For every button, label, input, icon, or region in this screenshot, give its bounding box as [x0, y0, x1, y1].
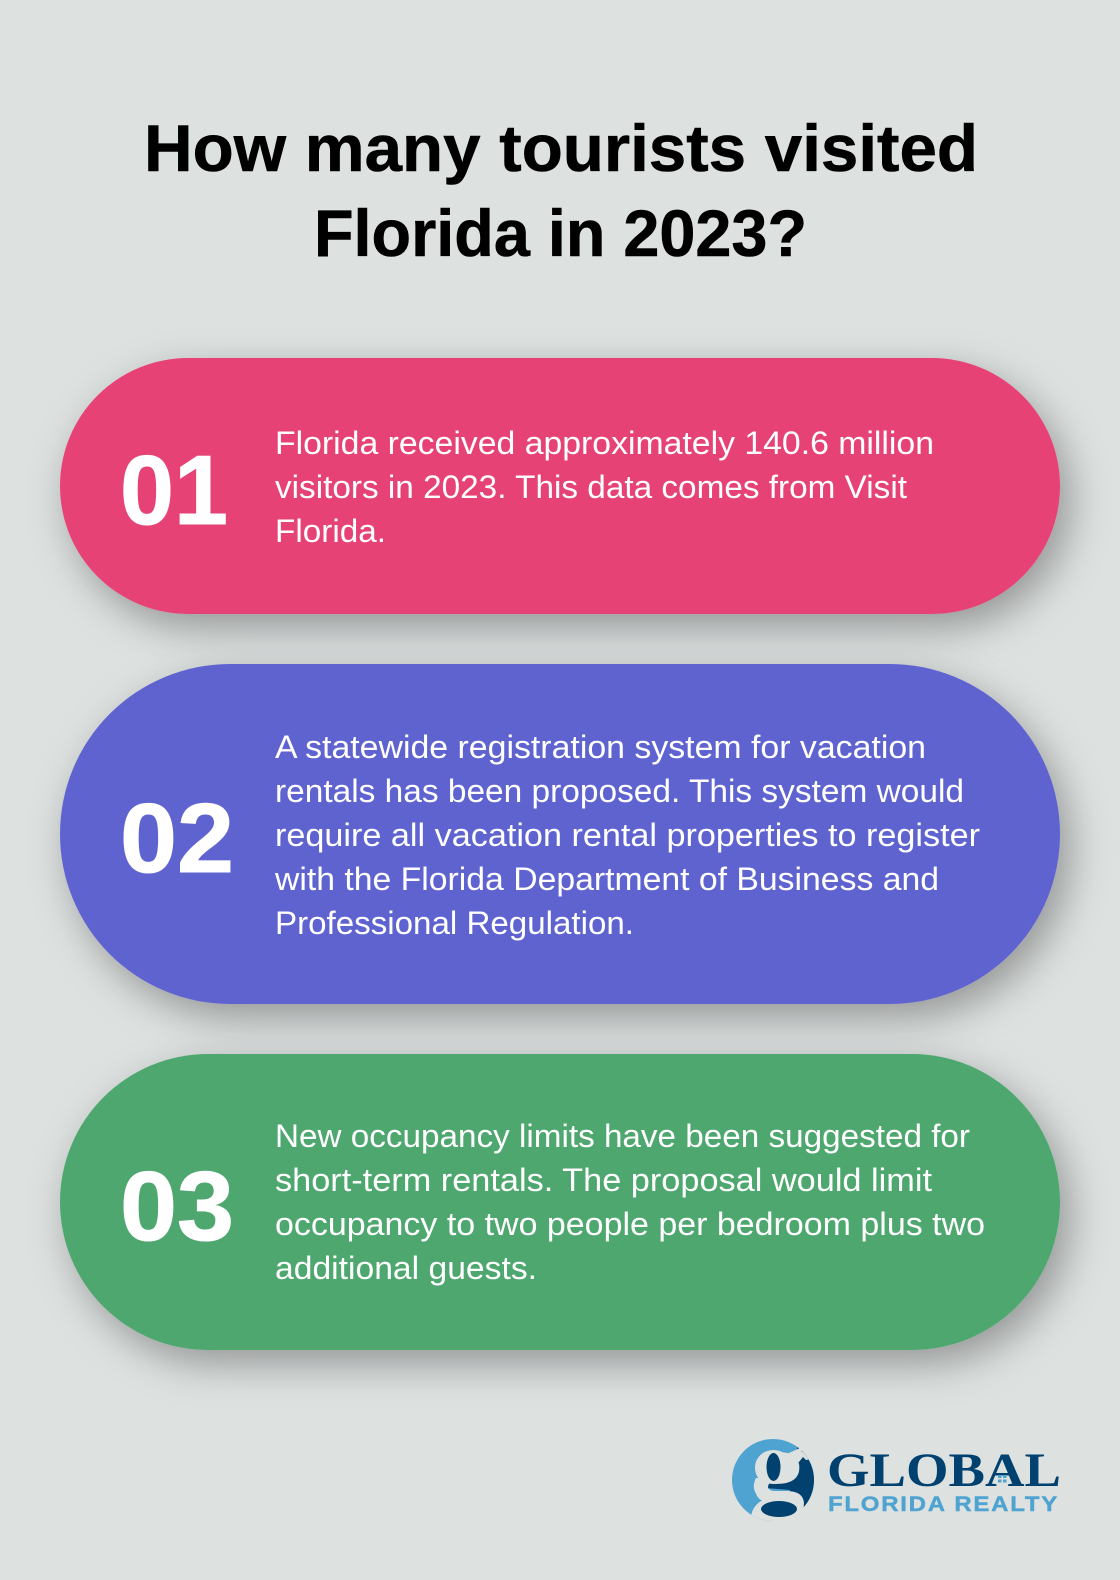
panel: step 01: [60, 358, 1060, 614]
panel background pink: [60, 358, 1060, 614]
title: Florida in 2023?: [314, 196, 807, 270]
logo wordmark GLOBAL: GLOBAL: [827, 1444, 1061, 1497]
icon: house window in wordmark: [998, 1475, 1006, 1482]
title: How many tourists visited: [144, 111, 978, 185]
text block 02: require all vacation rental properties to register: [275, 817, 980, 853]
text block 03: occupancy to two people per bedroom plus two: [275, 1206, 985, 1242]
number 01: 01: [120, 435, 228, 545]
title: [144, 111, 978, 270]
panel background purple: [60, 664, 1060, 1004]
number 02: 02: [120, 783, 234, 893]
text block 02: [274, 729, 980, 941]
text block 01: Florida received approximately 140.6 million: [275, 425, 934, 461]
text block 01: visitors in 2023. This data comes from Visit: [275, 469, 907, 505]
icon: logo circle with g: [732, 1439, 814, 1521]
panel: step 02: [60, 664, 1060, 1004]
text block 02: rentals has been proposed. This system would: [275, 773, 964, 809]
logo wordmark FLORIDA REALTY: FLORIDA REALTY: [828, 1493, 1059, 1516]
text block 03: New occupancy limits have been suggested for: [275, 1118, 970, 1154]
text block 03: additional guests.: [275, 1250, 537, 1286]
text block 02: with the Florida Department of Business and: [274, 861, 939, 897]
icon: logo circle with g: g: [751, 1410, 805, 1521]
text block 01: Florida.: [275, 513, 386, 549]
text block 01: [275, 425, 934, 549]
text block 02: A statewide registration system for vacation: [275, 729, 926, 765]
text block 03: [275, 1118, 985, 1286]
panel background green: [60, 1054, 1060, 1350]
number 03: 03: [120, 1151, 234, 1261]
text block 02: Professional Regulation.: [275, 905, 634, 941]
panel: step 03: [60, 1054, 1060, 1350]
text block 03: short-term rentals. The proposal would limit: [275, 1162, 932, 1198]
logo: Global Florida Realty: [732, 1439, 1059, 1521]
